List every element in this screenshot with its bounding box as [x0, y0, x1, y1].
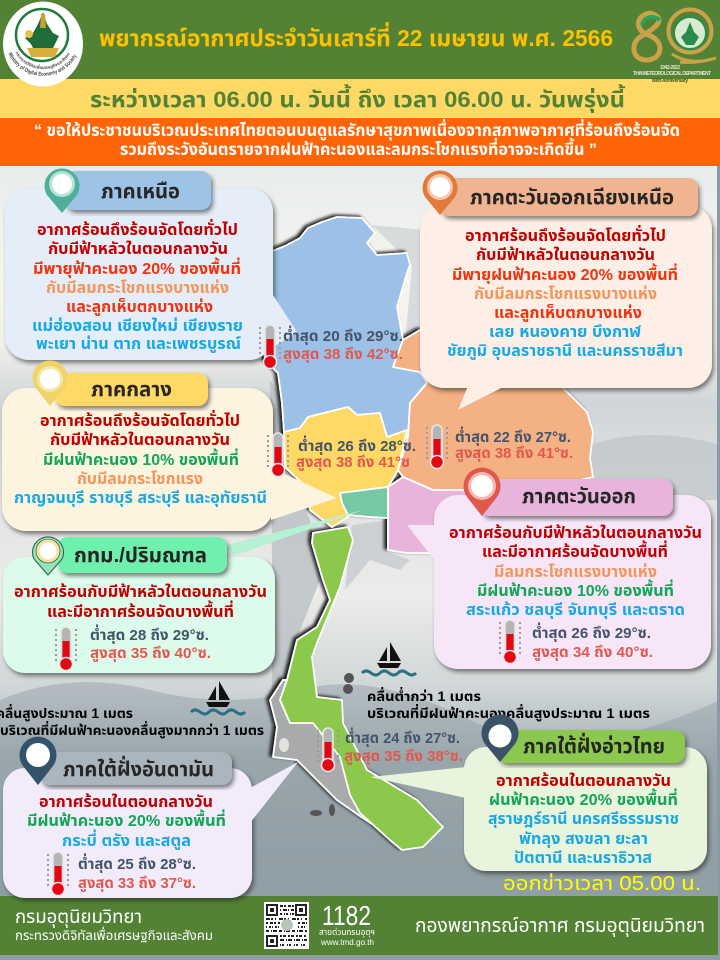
northeast temperatures: ต่ำสุด 22 ถึง 27°ซ. — [455, 426, 571, 446]
text block: กระบี่ ตรัง และสตูล — [62, 829, 191, 851]
icon: boat gulf — [362, 642, 416, 675]
map of Thailand — [262, 217, 593, 850]
region: Andaman — [270, 680, 378, 828]
icon: pin — [422, 170, 458, 215]
logo: 80th anniversary — [633, 10, 716, 84]
footer band: www.tmd.go.th — [320, 938, 374, 947]
northeast temperatures: สูงสุด 38 ถึง 41°ซ. — [455, 445, 573, 463]
text block: ฝนฟ้าคะนอง 20% ของพื้นที่ — [489, 788, 678, 809]
region: northeast — [393, 330, 593, 490]
text block: กาญจนบุรี ราชบุรี สระบุรี และอุทัยธานี — [14, 490, 267, 507]
text block — [32, 219, 243, 354]
wave text gulf: คลื่นต่ำกว่า 1 เมตร — [367, 687, 481, 704]
text block — [449, 524, 702, 619]
wave text andaman: บริเวณที่มีฝนฟ้าคะนองคลื่นสูงมากกว่า 1 เมตร — [0, 721, 264, 740]
south temperatures — [318, 727, 463, 772]
region: central — [284, 407, 407, 527]
central temperatures: ต่ำสุด 26 ถึง 28°ซ. — [298, 435, 416, 455]
text block: มีฝนฟ้าคะนอง 20% ของพื้นที่ — [27, 809, 226, 830]
panel: central — [2, 360, 337, 531]
text block: และมีอากาศร้อนจัดบางพื้นที่ — [482, 540, 668, 561]
panel: north — [5, 168, 297, 360]
temperatures: ต่ำสุด 28 ถึง 29°ซ. — [90, 624, 209, 644]
icon: pin — [464, 468, 500, 516]
release time: ออกข่าวเวลา 05.00 น. — [503, 872, 701, 895]
logo: 80th anniversary: 1942-2022 — [660, 65, 680, 71]
heading — [58, 537, 227, 573]
text block: กับมีลมกระโชกแรง — [77, 471, 203, 488]
temperatures: สูงสุด 34 ถึง 40°ซ. — [532, 644, 653, 662]
heading — [65, 171, 211, 210]
footer band: สายด่วนกรมอุตุฯ — [319, 927, 375, 937]
department name: กรมอุตุนิยมวิทยา — [15, 907, 142, 928]
region: south gulf — [280, 527, 443, 850]
temperatures — [500, 620, 653, 664]
region: Bangkok — [340, 487, 388, 518]
region: north — [262, 217, 427, 440]
text block — [14, 583, 267, 621]
panel: Bangkok and vicinity — [3, 510, 363, 673]
north temperatures: ต่ำสุด 20 ถึง 29°ซ. — [283, 325, 403, 345]
logo: department seal: Ministry of Digital Economy and Society — [8, 52, 77, 76]
text block: และลูกเห็บตกบางแห่ง — [66, 298, 213, 317]
heading — [440, 178, 698, 216]
text block: สระแก้ว ชลบุรี จันทบุรี และตราด — [466, 601, 685, 619]
temperatures: ต่ำสุด 25 ถึง 28°ซ. — [78, 853, 196, 873]
header band — [0, 0, 720, 79]
north temperatures — [260, 325, 403, 368]
text block: อากาศร้อนกับมีฟ้าหลัวในตอนกลางวัน — [449, 524, 702, 542]
icon: pin — [32, 360, 68, 406]
text block: พัทลุง สงขลา ยะลา — [519, 831, 648, 848]
wave text gulf — [367, 687, 650, 723]
footer band: กระทรวงดิจิทัลเพื่อเศรษฐกิจและสังคม — [15, 926, 213, 943]
heading: ภาคตะวันออกเฉียงเหนือ — [470, 187, 674, 209]
advisory band: รวมถึงระวังอันตรายจากฝนฟ้าคะนองและลมกระโชกแรงที่อาจจะเกิดขึ้น ” — [120, 137, 597, 159]
wave text andaman — [0, 704, 264, 740]
text block: มีฝนฟ้าคะนอง 10% ของพื้นที่ — [43, 448, 239, 469]
logo: 80th anniversary: THAI METEOROLOGICAL DEPARTMENT — [633, 71, 711, 77]
text block: อากาศร้อนถึงร้อนจัดโดยทั่วไป — [37, 219, 238, 239]
text block: มีพายุฟ้าคะนอง 20% ของพื้นที่ — [33, 257, 241, 278]
icon: pin — [33, 537, 64, 575]
temperatures: สูงสุด 35 ถึง 40°ซ. — [90, 645, 211, 663]
advisory band: “ ขอให้ประชาชนบริเวณประเทศไทยตอนบนดูแลรักษาสุขภาพเนื่องจากสภาพอากาศที่ร้อนถึงร้อนจัด — [34, 118, 680, 141]
text block: แม่ฮ่องสอน เชียงใหม่ เชียงราย — [32, 317, 243, 335]
north temperatures: สูงสุด 38 ถึง 42°ซ. — [283, 346, 403, 364]
panel: northeast — [420, 170, 712, 410]
text block — [27, 793, 226, 851]
south temperatures: สูงสุด 35 ถึง 38°ซ. — [344, 748, 463, 766]
logo: department seal: กระทรวงดิจิทัลเพื่อเศรษฐกิจและสังคม — [15, 52, 70, 70]
icon: pin — [20, 737, 56, 785]
central temperatures: สูงสุด 38 ถึง 41°ซ — [296, 454, 410, 472]
heading: กทม./ปริมณฑล — [74, 545, 207, 567]
south temperatures: ต่ำสุด 24 ถึง 27°ซ. — [345, 727, 460, 747]
panel: east — [407, 468, 711, 669]
icon: pin — [482, 715, 518, 762]
heading: ภาคกลาง — [91, 379, 172, 401]
time range band: ระหว่างเวลา 06.00 น. วันนี้ ถึง เวลา 06.00 น. วันพรุ่งนี้ — [90, 84, 626, 113]
time range band — [0, 79, 720, 117]
text block — [447, 225, 683, 361]
heading: ภาคใต้ฝั่งอ่าวไทย — [523, 733, 665, 758]
text block: กับมีลมกระโชกแรงบางแห่ง — [474, 285, 657, 303]
text block — [488, 772, 679, 867]
text block: มีพายุฝนฟ้าคะนอง 20% ของพื้นที่ — [452, 263, 678, 284]
central temperatures — [268, 433, 416, 476]
footer band — [0, 896, 718, 955]
panel: south andaman — [3, 737, 298, 898]
heading — [40, 752, 232, 785]
hotline: 1182 — [322, 900, 371, 931]
region: east — [388, 477, 500, 560]
logo: 80th anniversary: 80th Anniversary — [652, 78, 688, 84]
heading — [497, 730, 685, 763]
text block: และมีอากาศร้อนจัดบางพื้นที่ — [47, 600, 234, 621]
text block: กับมีฟ้าหลัวในตอนกลางวัน — [476, 246, 655, 264]
text block: เลย หนองคาย บึงกาฬ — [489, 324, 642, 341]
heading: ภาคเหนือ — [101, 181, 180, 203]
islands — [279, 673, 354, 816]
text block: มีฝนฟ้าคะนอง 10% ของพื้นที่ — [477, 579, 674, 600]
panel: south gulf — [370, 715, 707, 871]
icon: pin — [44, 168, 80, 213]
icon: boat andaman — [191, 681, 245, 714]
heading: ภาคใต้ฝั่งอันดามัน — [63, 756, 214, 781]
advisory band — [0, 118, 720, 166]
temperatures — [56, 624, 211, 670]
text block: กับมีลมกระโชกแรงบางแห่ง — [46, 279, 229, 297]
text block: อากาศร้อนถึงร้อนจัดโดยทั่วไป — [40, 410, 240, 430]
forecast division: กองพยากรณ์อากาศ กรมอุตุนิยมวิทยา — [415, 915, 705, 937]
text block: ปัตตานี และนราธิวาส — [514, 850, 652, 867]
text block: กับมีฟ้าหลัวในตอนกลางวัน — [48, 240, 228, 258]
temperatures — [48, 852, 196, 896]
text block — [14, 410, 267, 507]
title: พยากรณ์อากาศประจำวันเสาร์ที่ 22 เมษายน พ.ศ. 2566 — [99, 22, 613, 51]
northeast temperatures — [427, 425, 573, 468]
QR code — [264, 902, 309, 949]
wave text gulf: บริเวณที่มีฝนฟ้าคะนองคลื่นสูงประมาณ 1 เมตร — [367, 704, 650, 723]
heading: ภาคตะวันออก — [522, 486, 636, 508]
text block: ชัยภูมิ อุบลราชธานี และนครราชสีมา — [447, 343, 683, 361]
text block: กับมีฟ้าหลัวในตอนกลางวัน — [50, 431, 230, 449]
temperatures: สูงสุด 33 ถึง 37°ซ. — [78, 875, 196, 893]
text block: อากาศร้อนกับมีฟ้าหลัวในตอนกลางวัน — [14, 583, 267, 601]
text block: พะเยา น่าน ตาก และเพชรบูรณ์ — [36, 335, 241, 354]
text block: มีลมกระโชกแรงบางแห่ง — [494, 563, 657, 581]
text block: อากาศร้อนถึงร้อนจัดโดยทั่วไป — [465, 225, 666, 245]
heading — [480, 479, 673, 516]
logo: department seal — [3, 2, 83, 86]
text block: อากาศร้อนในตอนกลางวัน — [39, 793, 213, 811]
text block: สุราษฎร์ธานี นครศรีธรรมราช — [488, 811, 679, 828]
heading — [55, 373, 208, 406]
temperatures: ต่ำสุด 26 ถึง 29°ซ. — [532, 622, 651, 642]
text block: อากาศร้อนในตอนกลางวัน — [496, 772, 671, 790]
text block: และลูกเห็บตกบางแห่ง — [494, 304, 642, 323]
